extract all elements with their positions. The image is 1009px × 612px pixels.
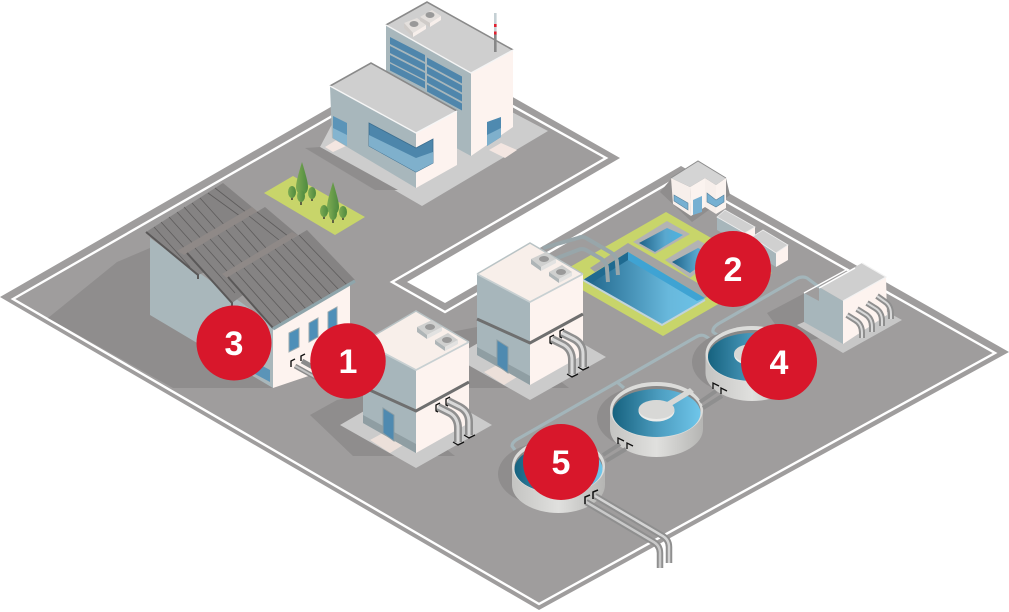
- tree lawn: [264, 162, 365, 235]
- rooftop fan A: [404, 18, 426, 37]
- marker 3: [196, 306, 272, 380]
- control building small: [660, 161, 730, 222]
- marker 1: [310, 323, 386, 399]
- warehouse hall: [146, 183, 355, 388]
- hall roof section 1: [146, 183, 258, 279]
- roof pipes into pool: [543, 237, 618, 282]
- lower small basin: [665, 240, 722, 278]
- storage box 2: [752, 230, 788, 267]
- upper small basin: [633, 221, 690, 254]
- door: [497, 340, 508, 373]
- marker 2: [695, 231, 771, 307]
- building 2: [424, 243, 606, 400]
- office door: [487, 117, 501, 146]
- outlet pipes from tank 5: [585, 490, 669, 568]
- tank 4: [692, 326, 798, 401]
- marker 4: [741, 324, 817, 400]
- pipes from hall to building 1: [291, 354, 372, 405]
- marker 5: 5: [552, 444, 570, 482]
- marker 5: [523, 424, 599, 500]
- outlet pipes: [436, 397, 475, 445]
- tank 5: [498, 438, 605, 513]
- storage box 1: [717, 210, 755, 246]
- rooftop fan B: [420, 10, 441, 27]
- building 1: [310, 311, 492, 468]
- office pad: [305, 90, 548, 206]
- tall office building: [386, 2, 513, 156]
- trees: [288, 162, 347, 223]
- front office building: [330, 63, 457, 188]
- marker 4: 4: [770, 344, 789, 382]
- door: [383, 408, 394, 441]
- hall windows: [289, 307, 337, 352]
- main pool lawn: [556, 212, 772, 336]
- roof fans: [417, 320, 458, 351]
- pipes between tanks: [603, 383, 727, 461]
- thin process pipes: [512, 277, 819, 450]
- hall side window: [255, 362, 270, 382]
- marker 2: 2: [724, 251, 742, 289]
- hall shadow: [48, 248, 273, 388]
- wrap-around window: [369, 123, 433, 172]
- marker 3: 3: [225, 325, 243, 363]
- marker 1: 1: [339, 343, 357, 381]
- pump pipes: [847, 296, 891, 338]
- roof fans: [531, 252, 572, 283]
- office window bands: [390, 37, 462, 110]
- tank 3: [597, 382, 703, 457]
- small window: [333, 116, 347, 146]
- outlet pipes: [550, 329, 589, 377]
- hall roof section 2: [187, 207, 298, 307]
- right pump building: [767, 263, 902, 353]
- main pool: [583, 243, 715, 325]
- antenna: [494, 13, 497, 52]
- hall roof section 3: [228, 230, 355, 329]
